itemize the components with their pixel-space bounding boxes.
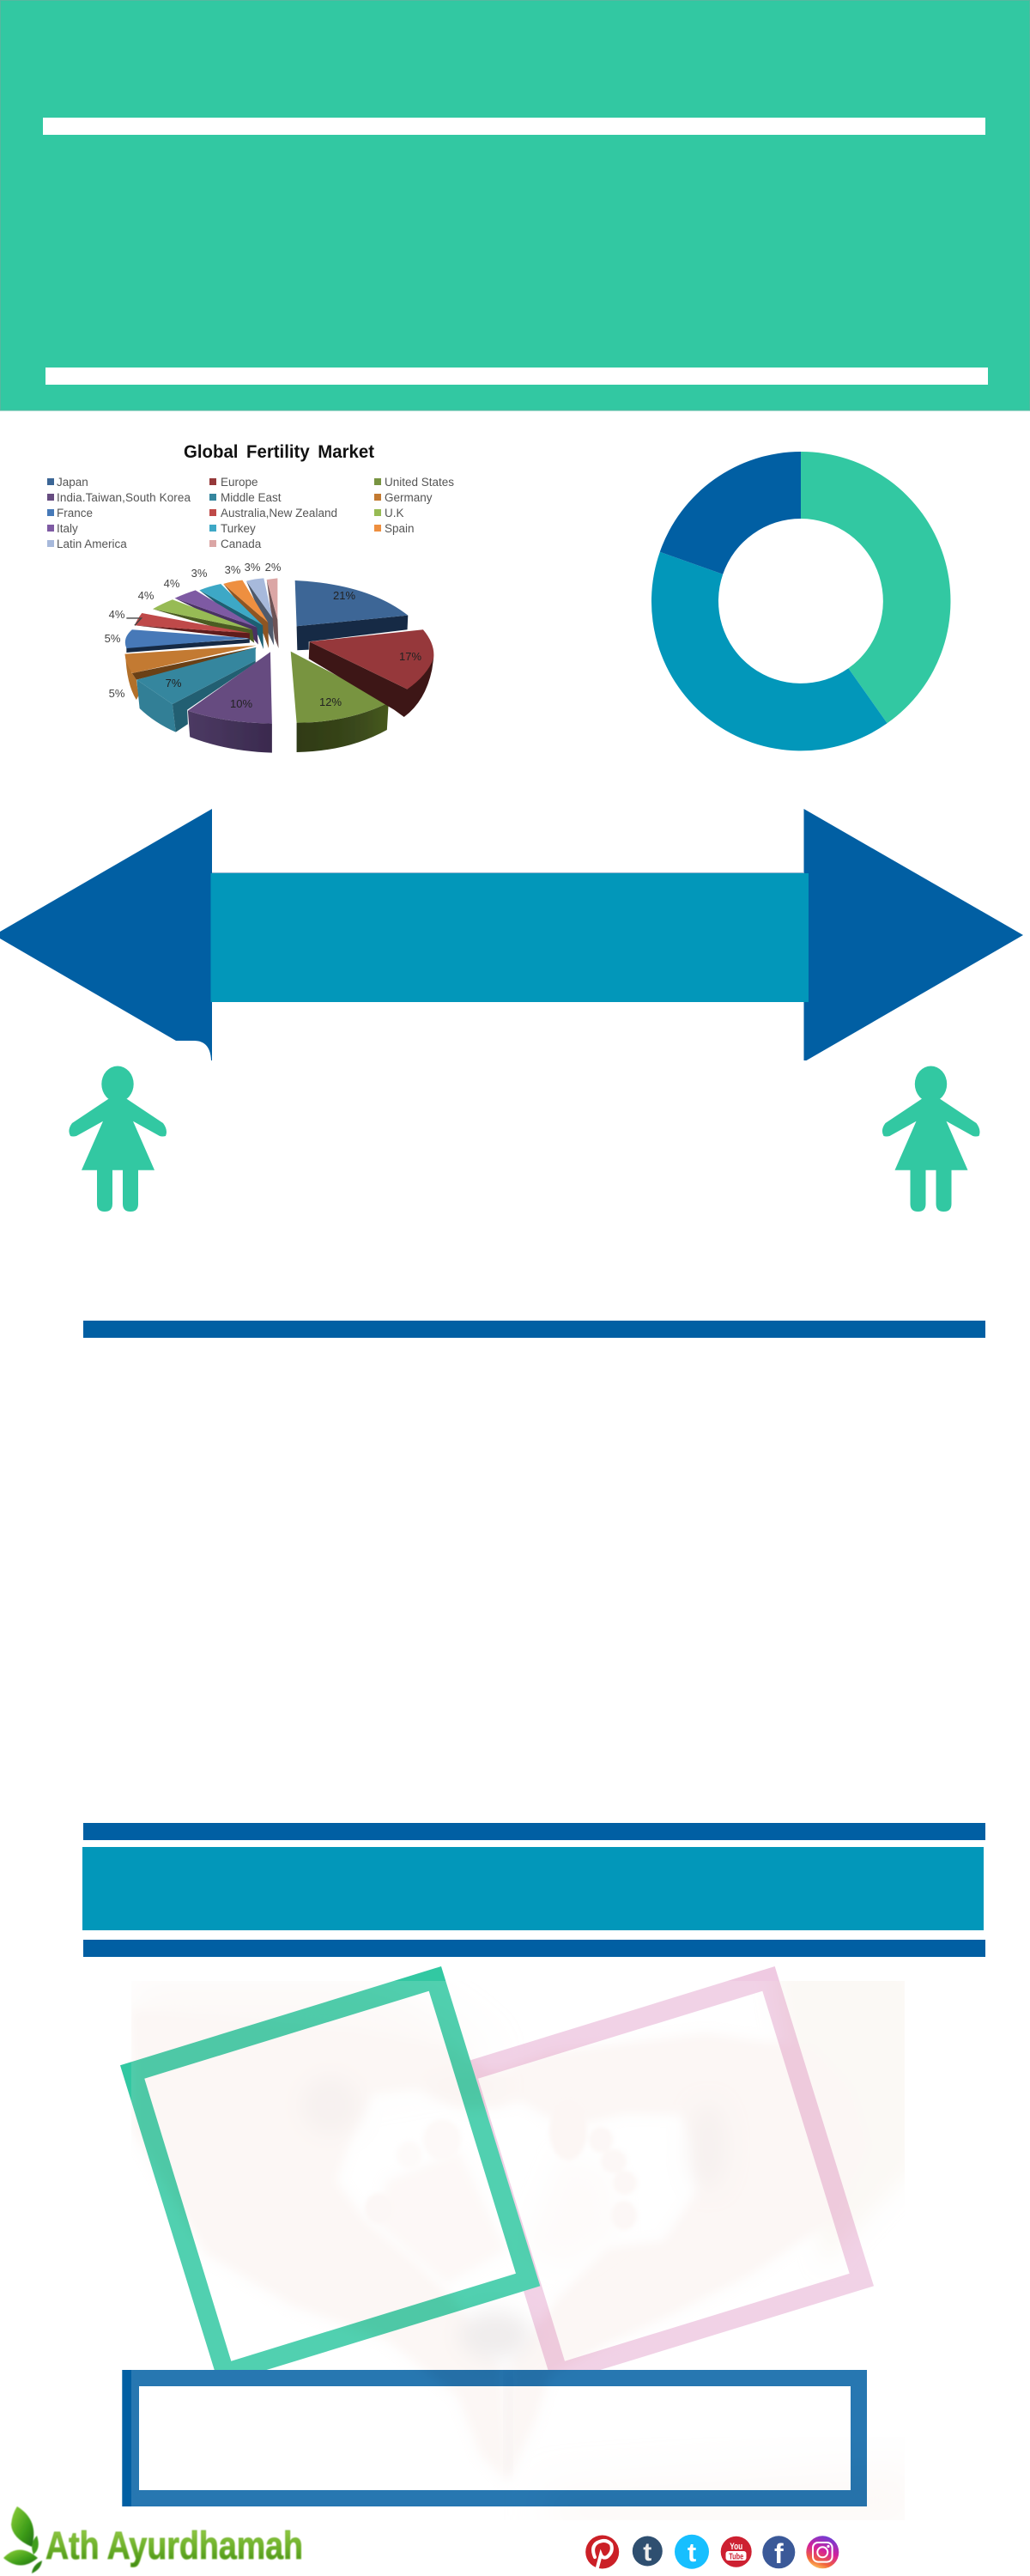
arrow banner [211,872,809,1002]
teal banner [82,1847,984,1930]
icon: twitter: t [688,2537,696,2567]
pie chart percentage labels: 4% [164,577,180,590]
pie chart legend: United States [385,476,454,489]
green tilted frame [120,1966,540,2385]
pie chart percentage labels: 7% [166,677,182,690]
divider bar middle [83,1823,985,1840]
icon: leaves [3,2506,42,2573]
pie chart legend: Turkey [221,522,256,535]
icon: woman left [69,1066,167,1212]
icon: woman right [882,1066,980,1212]
donut chart [651,452,950,750]
pie chart percentage labels: 3% [225,563,241,576]
pie chart legend: India.Taiwan,South Korea [57,491,191,504]
icon: instagram [806,2536,839,2568]
toes [367,2123,634,2215]
header panel [0,0,1030,410]
icon: youtube: You [730,2542,742,2552]
pie chart legend: Middle East [221,491,282,504]
divider bar bottom [83,1940,985,1957]
icon: facebook: f [774,2538,784,2569]
pie chart legend: Europe [221,476,258,489]
pie chart percentage labels [105,561,421,710]
icon: youtube: Tube [729,2552,744,2562]
logo: Ath Ayurdhamah: Ath Ayurdhamah [45,2524,303,2567]
arrow: left [0,809,212,1060]
pie chart percentage labels: 2% [265,561,282,574]
pie chart percentage labels: 3% [191,567,208,580]
logo: Ath Ayurdhamah [3,2506,303,2573]
divider bar top [83,1321,985,1338]
icon: pinterest [585,2535,619,2569]
right hand [506,2038,804,2449]
pie chart legend: Germany [385,491,433,504]
pie chart legend: Japan [57,476,88,489]
pie chart legend [47,476,454,550]
3D pie chart [124,578,433,753]
pie chart percentage labels: 10% [230,697,252,710]
icon: facebook [762,2536,795,2569]
arrow: right [803,809,1023,1060]
pink tilted frame [454,1966,874,2385]
left hand [136,2058,500,2464]
pie chart legend: Italy [57,522,78,535]
pie chart percentage labels: 17% [399,650,421,663]
icon: youtube [721,2537,752,2567]
foot soles [378,2151,506,2284]
icon: twitter [675,2535,709,2569]
pie chart legend: U.K [385,507,404,519]
pie chart legend: Australia,New Zealand [221,507,337,519]
icon: tumblr: t [643,2538,651,2567]
pie chart legend: Latin America [57,538,127,550]
pie chart percentage labels: 4% [109,608,125,621]
pie chart legend: Spain [385,522,415,535]
shadows [301,2076,360,2135]
photo: baby feet held in hands [131,1966,918,2533]
pie chart legend: Canada [221,538,262,550]
icon: tumblr [633,2537,663,2567]
pie chart percentage labels: 12% [319,696,342,708]
pie chart percentage labels: 5% [109,687,125,700]
pie chart percentage labels: 21% [333,589,355,602]
pie chart percentage labels: 3% [245,561,261,574]
chart title: Global Fertility Market [184,442,374,462]
pie chart percentage labels: 5% [105,632,121,645]
pie chart percentage labels: 4% [138,589,154,602]
blue outlined box [122,2370,867,2506]
pie chart legend: France [57,507,93,519]
